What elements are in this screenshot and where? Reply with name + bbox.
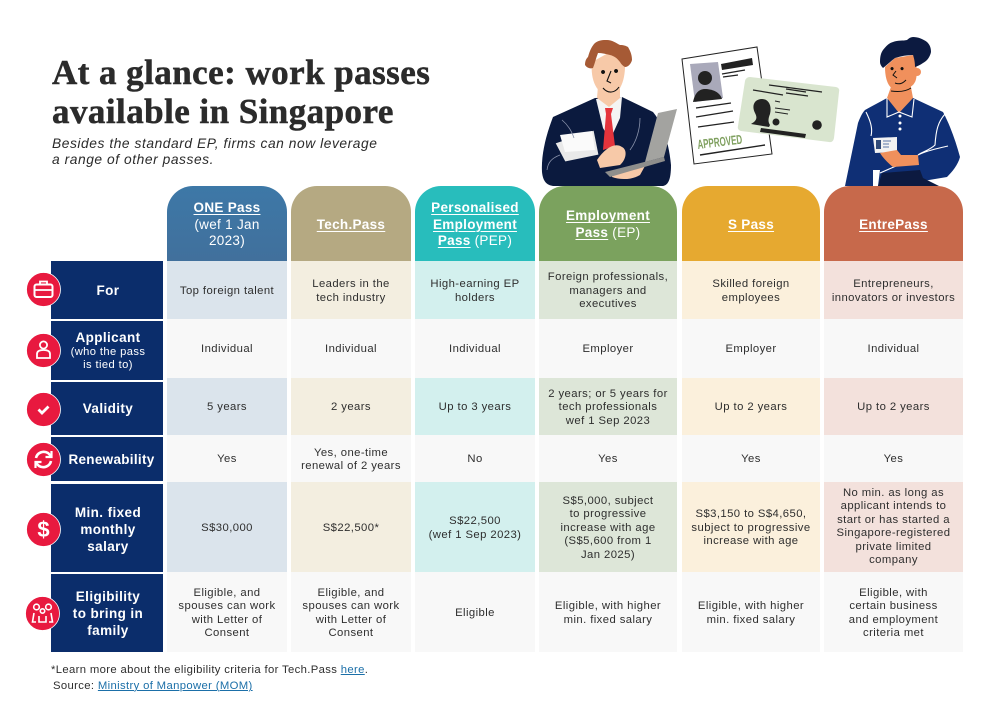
cell: EntrePass for: innovators or investors xyxy=(832,292,955,304)
cell: ONE Pass validity xyxy=(167,378,287,435)
row label: Applicant xyxy=(51,321,163,380)
cell: Tech.Pass for: Leaders in the xyxy=(312,278,390,290)
row label: Eligibility to bring in family xyxy=(51,574,163,652)
cell: EntrePass salary: start or has started a xyxy=(837,514,950,526)
cell: EP applicant: Employer xyxy=(582,343,634,355)
cell: Tech.Pass renewability xyxy=(291,435,411,482)
cell: EP for xyxy=(539,261,677,319)
cell: EP for: executives xyxy=(579,298,637,310)
cell: EP renewability xyxy=(539,435,677,482)
cell: EntrePass salary xyxy=(824,482,963,572)
illustration: ID card xyxy=(738,77,840,142)
cell: ONE Pass family: with Letter of xyxy=(192,614,262,626)
cell: EP validity: tech professionals xyxy=(559,401,657,413)
cell: Tech.Pass for: tech industry xyxy=(316,292,386,304)
footnote and source: *Learn more about the eligibility criteria for Tech.Pass here. xyxy=(51,664,368,676)
cell: EntrePass validity xyxy=(824,378,963,435)
row label: Applicant: (who the pass xyxy=(71,346,145,358)
cell: EntrePass salary: applicant intends to xyxy=(841,500,946,512)
cell: Tech.Pass family xyxy=(291,572,411,652)
cell: S Pass family xyxy=(682,572,820,652)
footnote and source: Source: Ministry of Manpower (MOM) xyxy=(53,680,253,692)
column header: Employment Pass: Pass (EP) xyxy=(575,225,640,240)
cell: EntrePass family: and employment xyxy=(849,614,938,626)
cell: ONE Pass family: spouses can work xyxy=(178,600,276,612)
cell: Tech.Pass family: with Letter of xyxy=(316,614,386,626)
cell: S Pass for: employees xyxy=(722,292,780,304)
cell: ONE Pass renewability: Yes xyxy=(217,453,237,465)
cell: PEP validity: Up to 3 years xyxy=(439,401,511,413)
row label: Renewability: Renewability xyxy=(68,452,155,466)
cell: Tech.Pass validity xyxy=(291,378,411,435)
column header: ONE Pass: (wef 1 Jan xyxy=(194,217,260,232)
cell: EP salary: (S$5,600 from 1 xyxy=(564,535,652,547)
cell: ONE Pass family xyxy=(167,572,287,652)
row label: Min. fixed monthly salary xyxy=(51,484,163,572)
cell: EntrePass family: Eligible, with xyxy=(859,586,928,598)
cell: PEP for: holders xyxy=(455,292,495,304)
column header: Tech.Pass xyxy=(291,186,411,261)
row label: Applicant: is tied to) xyxy=(83,359,133,371)
cell: PEP for xyxy=(415,261,535,319)
column header: PEP: Personalised xyxy=(431,200,519,215)
row label: Min. fixed monthly salary: monthly xyxy=(80,522,136,536)
column header: PEP: Employment xyxy=(433,217,517,232)
row label: Validity: Validity xyxy=(83,401,133,416)
illustration: woman holding pass xyxy=(845,37,960,186)
cell: EntrePass applicant: Individual xyxy=(868,343,919,355)
cell: PEP salary: (wef 1 Sep 2023) xyxy=(429,528,521,540)
cell: Tech.Pass validity: 2 years xyxy=(331,401,371,413)
row label: Applicant: Applicant xyxy=(75,330,141,345)
cell: EP validity: wef 1 Sep 2023 xyxy=(566,415,650,427)
cell: EntrePass salary: company xyxy=(869,554,918,566)
cell: S Pass validity: Up to 2 years xyxy=(715,401,787,413)
cell: Tech.Pass applicant xyxy=(291,319,411,378)
cell: S Pass salary: increase with age xyxy=(703,535,799,547)
cell: EP family: Eligible, with higher xyxy=(555,600,661,612)
cell: S Pass renewability xyxy=(682,435,820,482)
cell: EntrePass renewability xyxy=(824,435,963,482)
cell: PEP family xyxy=(415,572,535,652)
cell: PEP salary: S$22,500 xyxy=(449,515,501,527)
cell: EP for: managers and xyxy=(569,285,647,297)
icon: family xyxy=(26,596,60,630)
title xyxy=(52,53,430,131)
row label: Renewability xyxy=(51,437,163,481)
icon: check mark xyxy=(26,392,61,426)
row label: Eligibility to bring in family: to bring in xyxy=(73,606,143,620)
cell: PEP salary xyxy=(415,482,535,572)
column header: EntrePass xyxy=(824,186,963,261)
icon: dollar xyxy=(26,512,61,546)
cell: S Pass renewability: Yes xyxy=(741,453,761,465)
cell: ONE Pass salary: S$30,000 xyxy=(201,522,253,534)
cell: EP applicant xyxy=(539,319,677,378)
illustration: businessman with laptop xyxy=(542,40,677,186)
cell: EP renewability: Yes xyxy=(598,453,618,465)
column header: PEP: Pass (PEP) xyxy=(438,233,512,248)
cell: ONE Pass family: Eligible, and xyxy=(193,586,260,598)
cell: ONE Pass salary xyxy=(167,482,287,572)
cell: EntrePass salary: private limited xyxy=(856,540,932,552)
cell: EntrePass salary: Singapore-registered xyxy=(837,527,950,539)
cell: Tech.Pass family: Consent xyxy=(328,627,374,639)
row label: For: For xyxy=(97,282,119,298)
illustration: approved document xyxy=(681,46,773,164)
title: At a glance: work passes xyxy=(52,53,430,92)
column header: S Pass: S Pass xyxy=(728,217,774,232)
cell: Tech.Pass family: spouses can work xyxy=(302,600,400,612)
row label: For xyxy=(51,261,163,319)
cell: ONE Pass validity: 5 years xyxy=(207,401,247,413)
cell: Tech.Pass applicant: Individual xyxy=(325,343,377,355)
cell: EntrePass applicant xyxy=(824,319,963,378)
column header: Tech.Pass: Tech.Pass xyxy=(317,217,385,232)
column header: Employment Pass xyxy=(539,186,677,261)
cell: Tech.Pass salary xyxy=(291,482,411,572)
cell: EntrePass validity: Up to 2 years xyxy=(857,401,930,413)
cell: Tech.Pass family: Eligible, and xyxy=(317,586,384,598)
cell: S Pass family: min. fixed salary xyxy=(707,614,795,626)
row label: Min. fixed monthly salary: salary xyxy=(87,538,129,554)
cell: ONE Pass for xyxy=(167,261,287,319)
column header: ONE Pass: 2023) xyxy=(209,233,245,248)
column header: ONE Pass: ONE Pass xyxy=(194,200,260,215)
footnote and source xyxy=(51,664,368,692)
cell: PEP family: Eligible xyxy=(455,607,495,619)
cell: S Pass validity xyxy=(682,378,820,435)
title: available in Singapore xyxy=(52,92,394,130)
icon: renew arrows xyxy=(26,442,61,476)
cell: ONE Pass family: Consent xyxy=(204,627,250,639)
cell: ONE Pass applicant xyxy=(167,319,287,378)
cell: PEP applicant: Individual xyxy=(449,343,501,355)
subtitle: a range of other passes. xyxy=(52,152,214,167)
cell: EP salary: increase with age xyxy=(560,522,656,534)
cell: PEP renewability: No xyxy=(467,453,483,465)
cell: ONE Pass applicant: Individual xyxy=(201,343,253,355)
cell: ONE Pass renewability xyxy=(167,435,287,482)
cell: EP salary: S$5,000, subject xyxy=(563,495,653,507)
column header: ONE Pass xyxy=(167,186,287,261)
cell: EP family: min. fixed salary xyxy=(564,614,652,626)
cell: EntrePass salary: No min. as long as xyxy=(843,486,944,498)
cell: EP for: Foreign professionals, xyxy=(548,271,668,283)
cell: EntrePass renewability: Yes xyxy=(884,453,903,465)
cell: S Pass family: Eligible, with higher xyxy=(698,600,804,612)
cell: EP validity xyxy=(539,378,677,435)
cell: S Pass for xyxy=(682,261,820,319)
cell: Tech.Pass for xyxy=(291,261,411,319)
icon: briefcase xyxy=(26,272,61,306)
cell: PEP applicant xyxy=(415,319,535,378)
column header: EntrePass: EntrePass xyxy=(859,217,928,232)
cell: EP salary: Jan 2025) xyxy=(581,549,635,561)
cell: EP salary xyxy=(539,482,677,572)
cell: EP family xyxy=(539,572,677,652)
cell: EntrePass family xyxy=(824,572,963,652)
cell: EntrePass family: certain business xyxy=(849,600,938,612)
cell: ONE Pass for: Top foreign talent xyxy=(180,285,274,297)
subtitle: Besides the standard EP, firms can now leverage xyxy=(52,136,377,151)
cell: S Pass for: Skilled foreign xyxy=(712,278,790,290)
cell: S Pass applicant xyxy=(682,319,820,378)
icon: person xyxy=(26,334,61,368)
cell: Tech.Pass renewability: Yes, one-time xyxy=(314,446,388,458)
cell: EntrePass for: Entrepreneurs, xyxy=(853,278,934,290)
cell: S Pass salary: S$3,150 to S$4,650, xyxy=(695,508,806,520)
illustration: approved document: APPROVED xyxy=(697,132,743,152)
cell: PEP for: High-earning EP xyxy=(430,278,520,290)
cell: EntrePass family: criteria met xyxy=(863,627,924,639)
cell: PEP renewability xyxy=(415,435,535,482)
cell: EntrePass for xyxy=(824,261,963,319)
row label: Eligibility to bring in family: family xyxy=(87,622,129,638)
cell: S Pass applicant: Employer xyxy=(725,343,777,355)
column header: PEP xyxy=(415,186,535,261)
cell: S Pass salary xyxy=(682,482,820,572)
icon: dollar: $ xyxy=(37,517,50,542)
row label: Validity xyxy=(51,382,163,435)
column header: Employment Pass: Employment xyxy=(566,208,650,223)
subtitle xyxy=(52,136,377,167)
cell: EP salary: to progressive xyxy=(570,508,646,520)
row label: Min. fixed monthly salary: Min. fixed xyxy=(75,504,141,520)
cell: Tech.Pass renewability: renewal of 2 years xyxy=(301,460,401,472)
cell: PEP validity xyxy=(415,378,535,435)
row label: Eligibility to bring in family: Eligibility xyxy=(76,588,140,604)
cell: S Pass salary: subject to progressive xyxy=(691,522,811,534)
cell: Tech.Pass salary: S$22,500* xyxy=(323,522,379,534)
column header: S Pass xyxy=(682,186,820,261)
cell: EP validity: 2 years; or 5 years for xyxy=(548,388,668,400)
